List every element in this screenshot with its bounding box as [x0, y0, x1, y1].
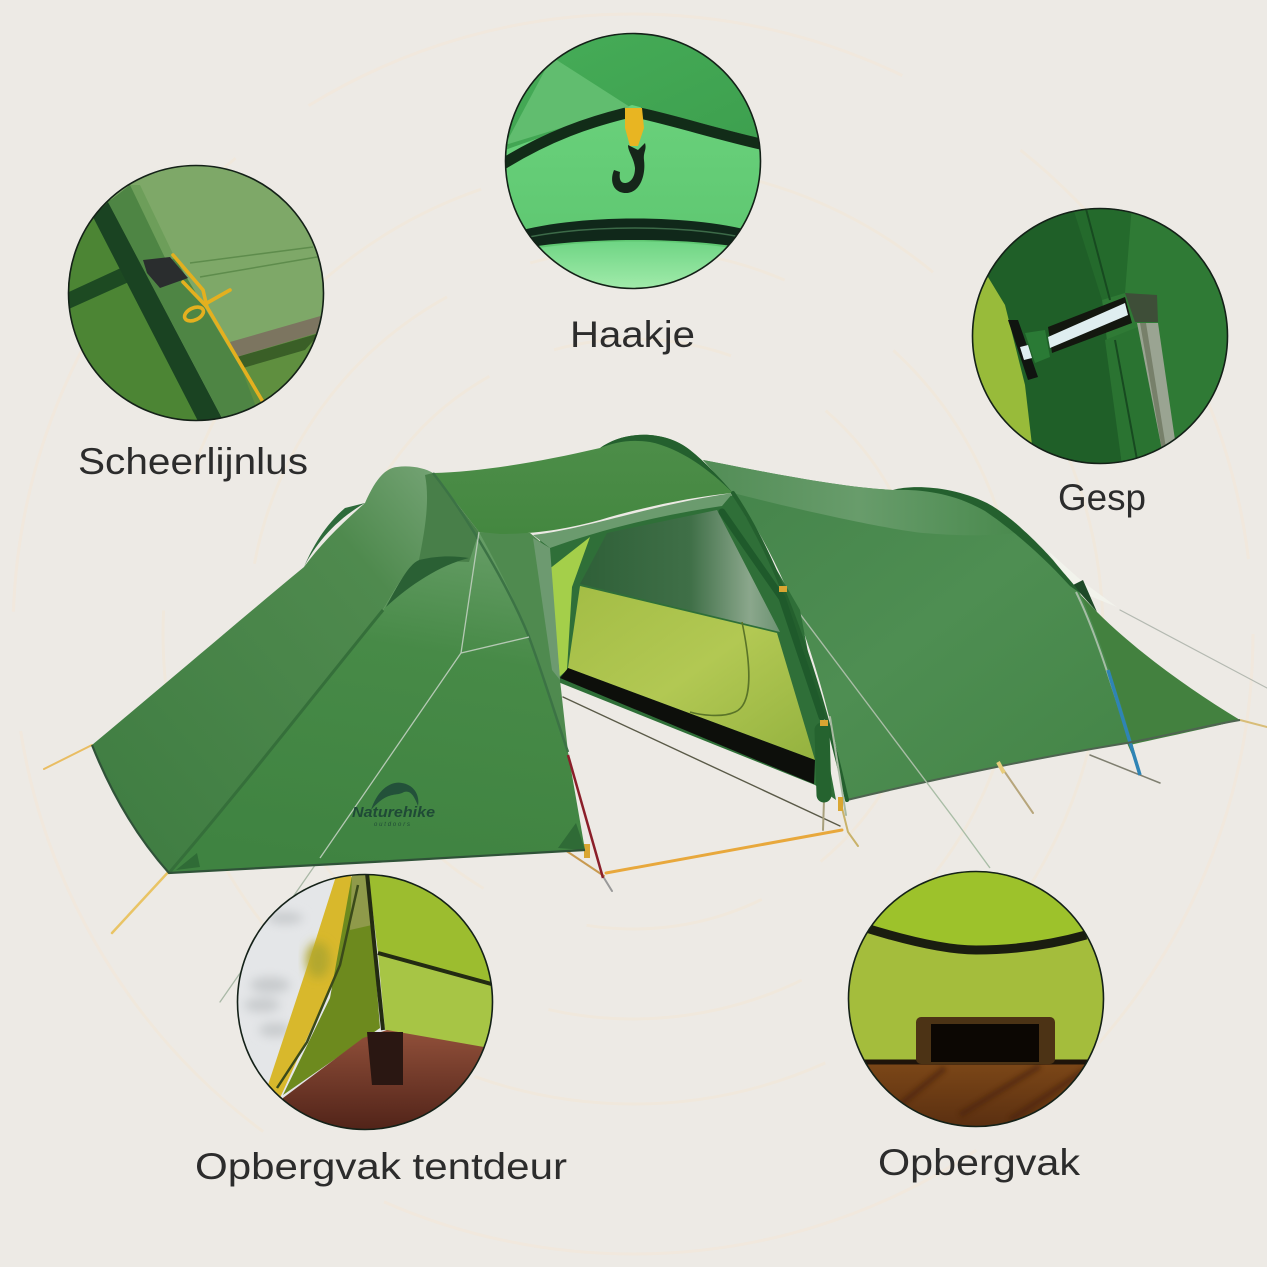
- amber clips: [584, 586, 843, 858]
- hood dark hoop: [600, 435, 733, 493]
- detail: storage pocket: [848, 868, 1106, 1130]
- black clip: [143, 257, 188, 288]
- main tunnel body: [703, 460, 1140, 800]
- black hook: [612, 143, 646, 193]
- floor: [848, 1060, 1106, 1130]
- neck shade panel: [419, 473, 479, 562]
- corner reinforcements: [176, 853, 200, 870]
- rear tail panel: [1076, 590, 1240, 745]
- label: Gesp: Gesp: [1058, 477, 1146, 518]
- vent opening: [386, 556, 469, 607]
- wall lower: [378, 953, 495, 1050]
- detail: guy line loop: [60, 165, 326, 430]
- grey reinforcement: [230, 315, 324, 357]
- lower panel: [541, 242, 726, 288]
- floor streaks: [900, 1066, 1085, 1120]
- left vestibule panel: [92, 466, 433, 873]
- rear end vent: [1047, 550, 1117, 607]
- tent illustration: [44, 435, 1267, 1002]
- black floor strip: [560, 668, 815, 784]
- detail: hook: [503, 30, 765, 295]
- detail: buckle: [965, 200, 1230, 470]
- strap: [1048, 297, 1132, 353]
- yellow cord: [173, 255, 263, 402]
- mesh window: [580, 510, 780, 632]
- lime wedge: [973, 277, 1032, 443]
- aluminium pole: [1137, 323, 1175, 450]
- body guy line: [797, 610, 990, 868]
- label: Scheerlijnlus: Scheerlijnlus: [78, 441, 308, 482]
- pole sleeve: [1125, 293, 1158, 322]
- upper black binding: [503, 113, 765, 164]
- logo wordmark: Naturehike: [352, 804, 435, 821]
- pole dark band: [93, 202, 223, 425]
- yellow strap: [625, 108, 644, 146]
- pole highlight: [130, 185, 175, 262]
- snow texture: [244, 912, 303, 1037]
- panel crease: [169, 610, 383, 873]
- left bottom edge: [92, 745, 585, 873]
- label: Haakje: Haakje: [570, 314, 695, 355]
- dark pocket tab: [367, 1032, 403, 1085]
- left dark fabric: [988, 208, 1122, 463]
- door zipper: [690, 622, 749, 715]
- label: Opbergvak: Opbergvak: [878, 1142, 1081, 1183]
- left mesh panel: [68, 200, 198, 420]
- interior backing: [540, 495, 836, 800]
- inner tent wall: [568, 586, 815, 760]
- yellow fly: [268, 873, 357, 1098]
- vestibule guy lines: [320, 532, 529, 858]
- black binding: [866, 928, 1086, 950]
- mid tunnel hood: [433, 435, 733, 534]
- logo tagline: outdoors: [374, 822, 410, 828]
- body top band: [703, 460, 1015, 535]
- detail: door pocket: [237, 873, 495, 1135]
- mesh door: [283, 875, 380, 1095]
- body lower edge: [847, 720, 1240, 800]
- lower band: [526, 218, 740, 246]
- door interior: [540, 495, 836, 800]
- reflective strip: [1048, 303, 1128, 348]
- jamb inner trim: [533, 538, 560, 680]
- right vestibule panel: [169, 532, 585, 873]
- label: Opbergvak tentdeur: Opbergvak tentdeur: [195, 1146, 567, 1187]
- pole green band: [108, 185, 263, 420]
- upper wall: [873, 871, 1083, 946]
- buckle: [1008, 320, 1038, 380]
- amber stake clips on body: [998, 762, 1004, 773]
- crossing strap: [69, 268, 127, 308]
- rear hoop band: [893, 487, 1080, 593]
- pocket mesh: [848, 932, 1106, 1060]
- stitch lines: [190, 247, 317, 277]
- inner side wall: [548, 537, 590, 678]
- vestibule pole: [433, 473, 568, 752]
- floor: [283, 1030, 495, 1135]
- centre seam bands: [1072, 205, 1132, 300]
- shaded lower fabric: [239, 334, 316, 404]
- red pole: [568, 755, 603, 878]
- brand logo: [352, 783, 435, 828]
- upper wall: [505, 30, 765, 150]
- pocket opening: [931, 1024, 1039, 1062]
- blue pole section: [1108, 670, 1140, 775]
- fly shadow: [306, 942, 330, 978]
- rear vent dark wedge: [1073, 580, 1097, 612]
- green tab: [1025, 330, 1050, 363]
- logo mountain: [371, 783, 418, 810]
- brown trim: [916, 1017, 1055, 1064]
- dark side mesh: [304, 503, 365, 567]
- seams: [367, 873, 495, 1030]
- rear pole: [1076, 592, 1140, 773]
- wall upper: [368, 873, 495, 985]
- ground lines and stakes: [44, 610, 1267, 1002]
- door poles: [722, 493, 847, 815]
- door top trim: [533, 493, 733, 548]
- door left jamb: [478, 532, 568, 752]
